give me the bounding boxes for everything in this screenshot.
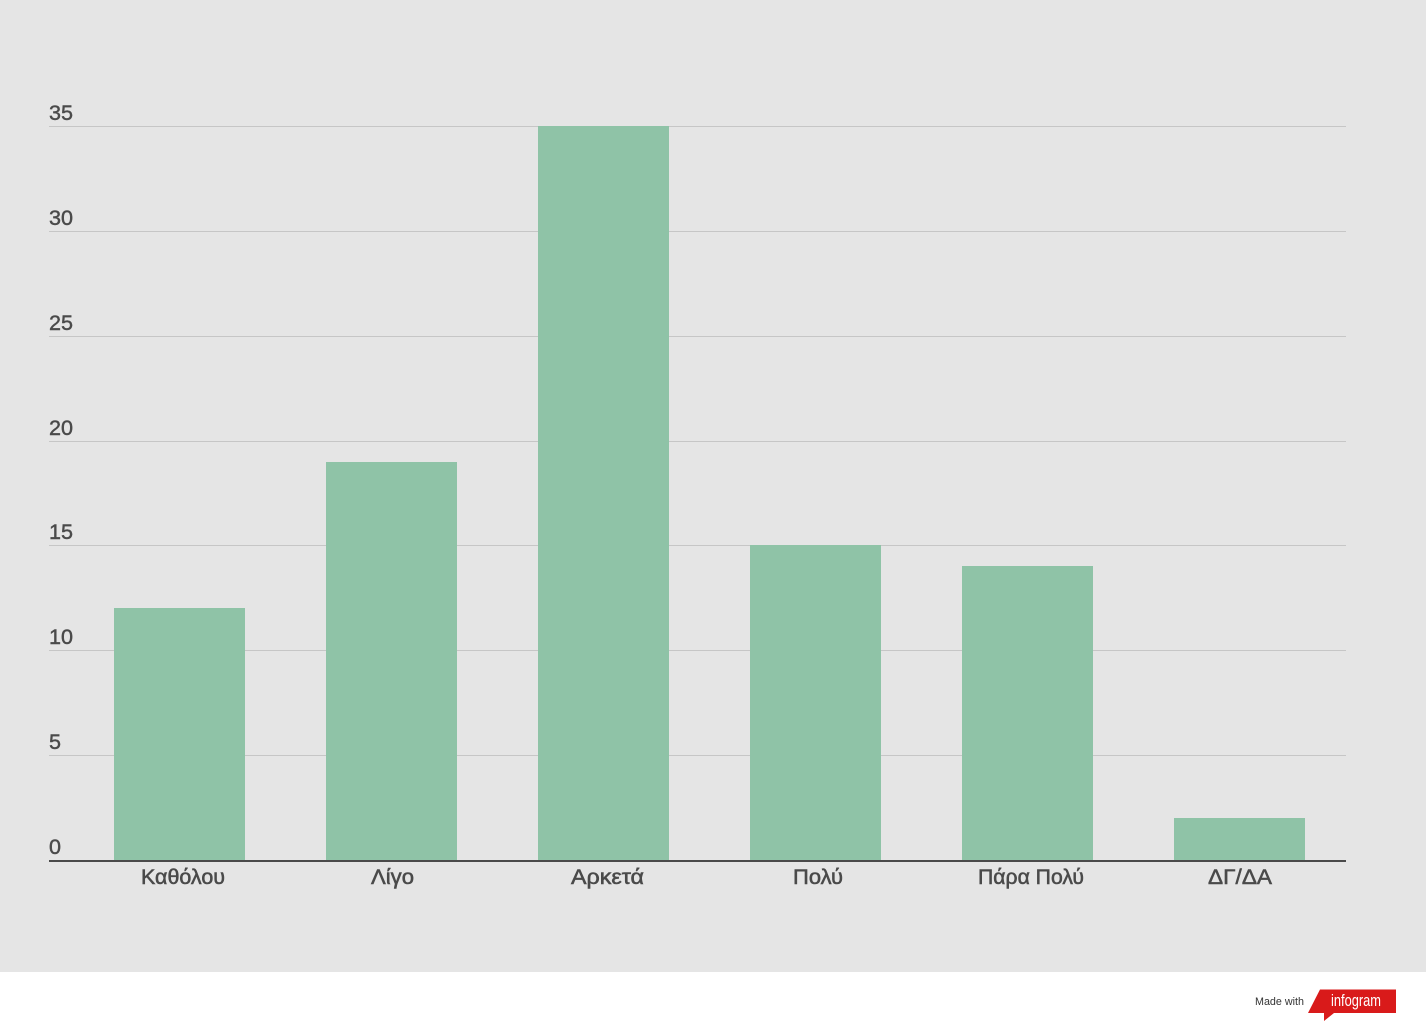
infogram logo badge bbox=[1308, 990, 1396, 1021]
y-axis labels: 35 bbox=[49, 101, 73, 125]
infogram wordmark: infogram bbox=[1331, 991, 1381, 1010]
x-axis labels: Λίγο bbox=[371, 866, 414, 889]
bar: Λίγο 19 bbox=[326, 462, 457, 860]
bar: Πάρα Πολύ 14 bbox=[962, 566, 1093, 860]
y-axis labels: 10 bbox=[49, 625, 73, 649]
y-axis labels: 25 bbox=[49, 311, 73, 335]
bar: Πολύ 15 bbox=[750, 545, 881, 860]
y-axis labels: 5 bbox=[49, 730, 61, 754]
y-axis labels: 30 bbox=[49, 206, 73, 230]
bars bbox=[114, 126, 1305, 860]
y-axis labels: 20 bbox=[49, 416, 73, 440]
x-axis labels: ΔΓ/ΔΑ bbox=[1208, 866, 1272, 889]
x-axis labels: Πολύ bbox=[793, 866, 843, 889]
bar: Καθόλου 12 bbox=[114, 608, 245, 860]
x-axis labels bbox=[141, 866, 1272, 889]
x-axis labels: Καθόλου bbox=[141, 866, 225, 889]
y-axis labels: 15 bbox=[49, 520, 73, 544]
footer credit: Made with infogram bbox=[1255, 990, 1396, 1021]
x-axis line bbox=[49, 860, 1346, 862]
bar: Αρκετά 35 bbox=[538, 126, 669, 860]
made with text: Made with bbox=[1255, 996, 1304, 1008]
x-axis labels: Πάρα Πολύ bbox=[978, 866, 1084, 889]
x-axis labels: Αρκετά bbox=[571, 866, 644, 889]
bar: ΔΓ/ΔΑ 2 bbox=[1174, 818, 1305, 860]
y-axis labels bbox=[49, 101, 73, 859]
y-axis labels: 0 bbox=[49, 835, 61, 859]
